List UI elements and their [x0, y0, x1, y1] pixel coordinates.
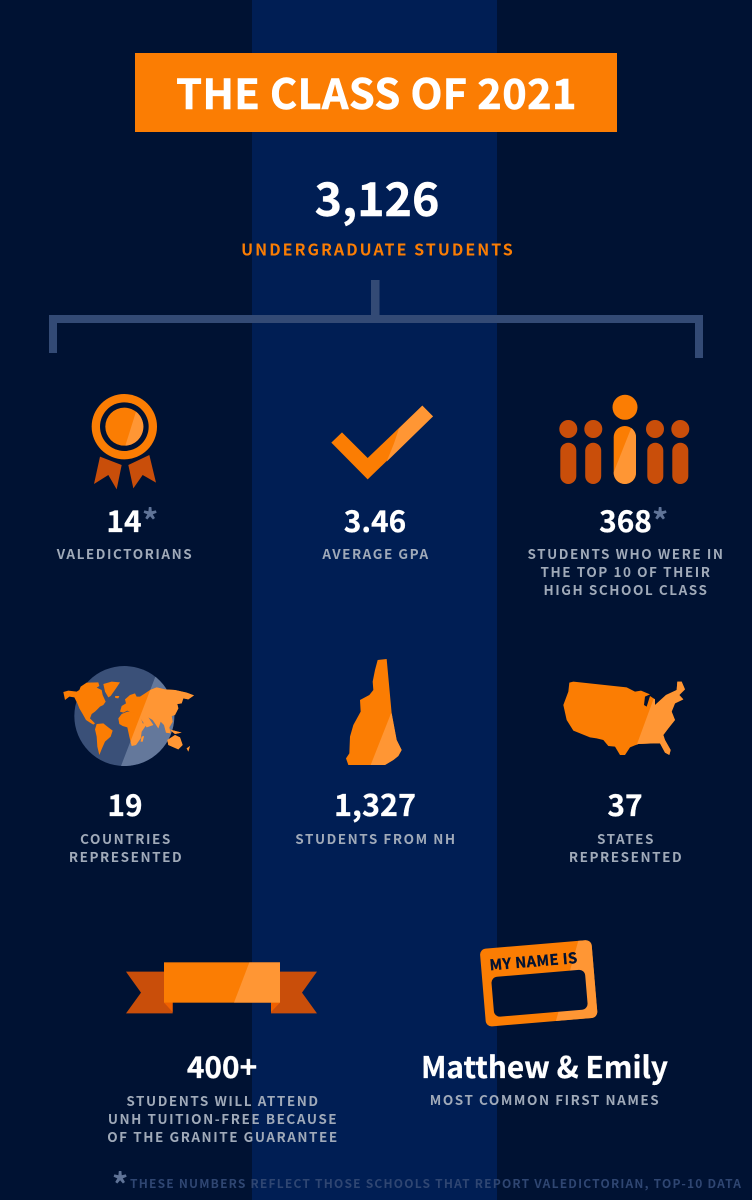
icon: name tag: MY NAME IS [489, 947, 578, 975]
label: valedictorians: VALEDICTORIANS [56, 543, 193, 563]
stat: students from NH [295, 659, 457, 848]
label: most common first names: MOST COMMON FIRST NAMES [430, 1089, 660, 1109]
stat: top 10 students [527, 395, 725, 599]
label: average GPA: AVERAGE GPA [321, 543, 430, 563]
icon: ribbon banner [126, 962, 317, 1013]
label: top 10 students: THE TOP 10 OF THEIR [541, 561, 711, 581]
number: 1,327: 1,327 [334, 781, 416, 825]
number: 400+: 400+ [187, 1043, 257, 1087]
icon: name tag [480, 940, 598, 1027]
label: granite guarantee: OF THE GRANITE GUARANTEE [107, 1126, 339, 1146]
total students number: 3,126 [315, 163, 439, 230]
number: 37: 37 [607, 781, 643, 825]
number: 3.46: 3.46 [344, 497, 406, 541]
bracket connector [49, 280, 703, 358]
names: Matthew & Emily [421, 1043, 668, 1087]
stat: average GPA [321, 406, 433, 563]
asterisk: * [652, 497, 668, 543]
number: 19: 19 [107, 781, 143, 825]
icon: people [559, 395, 689, 484]
label: states represented: STATES [597, 828, 655, 848]
footnote [112, 1161, 741, 1200]
icon: USA map [563, 682, 685, 755]
label: countries represented: COUNTRIES [80, 828, 172, 848]
number: 14: 14 [106, 497, 142, 541]
label: students from NH: STUDENTS FROM NH [295, 828, 457, 848]
icon: globe [63, 666, 194, 766]
undergraduate students label: UNDERGRADUATE STUDENTS [241, 236, 515, 260]
asterisk: * [142, 497, 158, 543]
icon: check mark [331, 406, 433, 479]
stat: states [563, 682, 685, 866]
stat: valedictorians [56, 394, 193, 563]
number: 368: 368 [599, 497, 652, 541]
stat: granite guarantee [107, 962, 339, 1146]
label: states represented: REPRESENTED [569, 846, 683, 866]
stat: common names [421, 940, 668, 1109]
label: countries represented: REPRESENTED [69, 846, 183, 866]
title banner: THE CLASS OF 2021 [176, 61, 577, 121]
stat: countries [63, 666, 194, 866]
label: top 10 students: HIGH SCHOOL CLASS [544, 579, 708, 599]
title banner [135, 53, 617, 132]
icon: New Hampshire [346, 659, 402, 765]
footnote text: THESE NUMBERS REFLECT THOSE SCHOOLS THAT REPORT VALEDICTORIAN, TOP-10 DATA [130, 1175, 741, 1192]
label: top 10 students: STUDENTS WHO WERE IN [527, 543, 725, 563]
label: granite guarantee: STUDENTS WILL ATTEND [126, 1090, 320, 1110]
label: granite guarantee: UNH TUITION-FREE BECAUSE [108, 1108, 338, 1128]
icon: medal [92, 394, 157, 489]
